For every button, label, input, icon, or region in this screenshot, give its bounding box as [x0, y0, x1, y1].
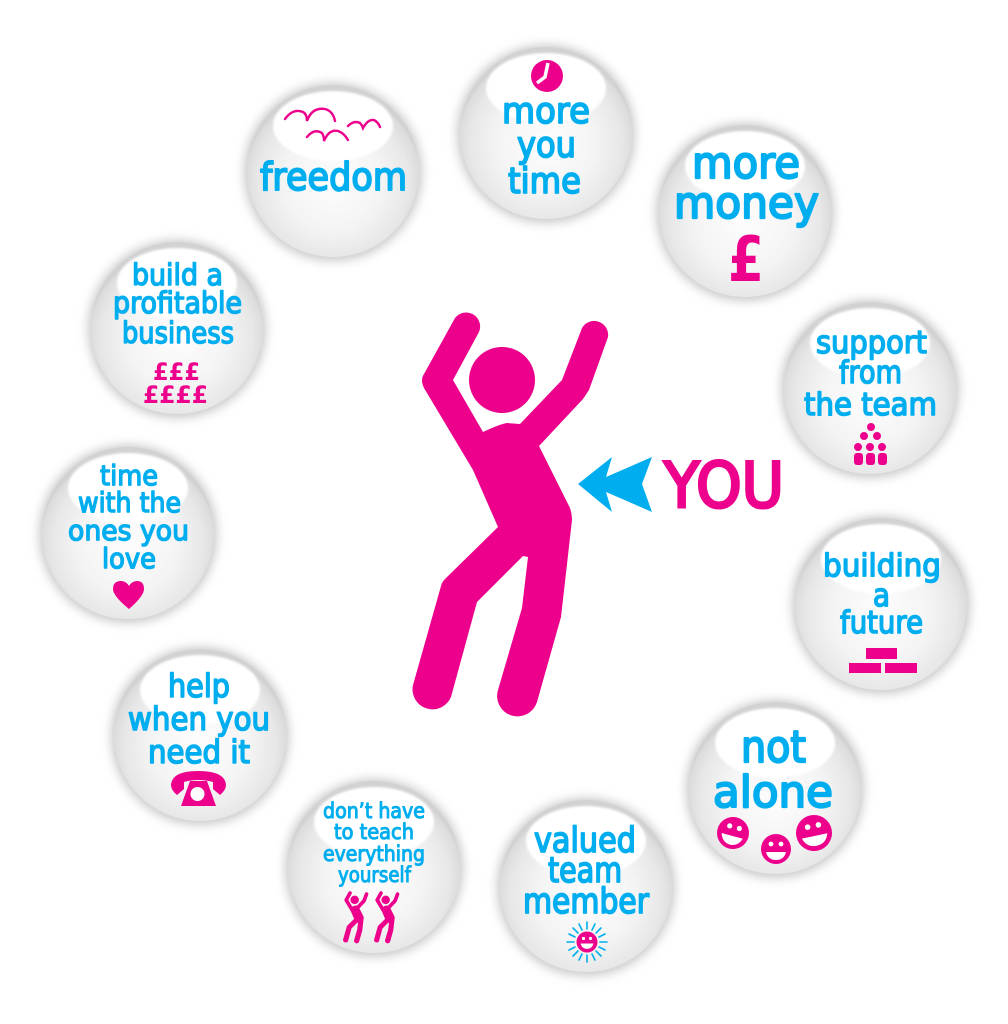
text: more you time	[502, 91, 590, 202]
text: build a profitable business: build a	[132, 258, 223, 292]
text: building a future: future	[840, 605, 923, 641]
button: freedom	[244, 83, 422, 261]
icon: pound signs: £££	[153, 358, 200, 386]
text: more money: money	[674, 178, 819, 229]
arrow pointing at figure	[578, 457, 652, 512]
text: don't have to teach everything yourself: everything	[323, 842, 425, 866]
text: don't have to teach everything yourself: don’t have	[323, 799, 425, 823]
text: support from the team	[804, 325, 937, 423]
text: time with the ones you love: love	[102, 542, 156, 575]
text: not alone: alone	[713, 767, 833, 818]
text: time with the ones you love: ones you	[68, 514, 189, 547]
text: don't have to teach everything yourself	[323, 799, 425, 887]
central figure: you	[413, 312, 608, 716]
text: build a profitable business	[113, 258, 242, 350]
text: freedom: freedom	[260, 155, 407, 199]
icon: pound signs	[143, 358, 208, 409]
text: support from the team: support	[816, 325, 927, 361]
text: help when you need it: when you	[128, 700, 270, 738]
icon: team pyramid	[854, 423, 887, 465]
icon: heart	[113, 581, 144, 609]
button: not alone	[686, 700, 864, 878]
text: more money: more	[692, 138, 800, 189]
button: help when you need it	[111, 647, 289, 825]
text: not alone: not	[741, 722, 806, 773]
icon: bricks	[849, 648, 917, 673]
text: building a future: a	[873, 578, 890, 614]
icon: two dancers	[343, 891, 399, 943]
text: more you time: time	[508, 161, 581, 202]
text: valued team member	[523, 821, 650, 922]
button: valued team member	[497, 798, 675, 976]
text: build a profitable business: business	[122, 316, 234, 350]
icon: pound sign: £	[728, 223, 764, 296]
button: building a future	[792, 516, 970, 694]
text: help when you need it: help	[168, 667, 230, 705]
icon: pound signs: ££££	[143, 381, 208, 409]
text: don't have to teach everything yourself: to teach	[334, 820, 414, 844]
button: more you time	[457, 45, 635, 223]
text: more you time: more	[502, 91, 590, 132]
text: valued team member: team	[548, 851, 622, 891]
text: valued team member: member	[523, 882, 650, 922]
text: more money	[674, 138, 819, 229]
text: building a future	[823, 548, 941, 641]
icon: smiling sun	[567, 922, 607, 962]
text: time with the ones you love: time	[100, 459, 158, 492]
text: time with the ones you love	[68, 459, 189, 575]
text: time with the ones you love: with the	[78, 486, 181, 519]
icon: clock	[531, 60, 563, 92]
YOU label: YOU	[663, 449, 784, 522]
text: building a future: building	[823, 548, 941, 584]
text: more you time: you	[517, 125, 576, 166]
icon: telephone	[171, 771, 226, 806]
text: build a profitable business: profitable	[113, 286, 242, 320]
icon: smiley faces	[713, 812, 835, 864]
button: more money	[656, 123, 834, 301]
text: support from the team: from	[839, 355, 902, 391]
button: time with the ones you love	[39, 445, 217, 623]
text: support from the team: the team	[804, 387, 937, 423]
text: help when you need it: need it	[148, 733, 250, 771]
text: don't have to teach everything yourself: yourself	[338, 863, 412, 887]
button: support from the team	[781, 300, 959, 478]
text: not alone	[713, 722, 833, 818]
text: help when you need it	[128, 667, 270, 771]
button: don't have to teach everything yourself	[285, 779, 463, 957]
icon: birds	[285, 109, 380, 141]
button: build a profitable business	[88, 240, 266, 418]
text: valued team member: valued	[534, 821, 636, 861]
